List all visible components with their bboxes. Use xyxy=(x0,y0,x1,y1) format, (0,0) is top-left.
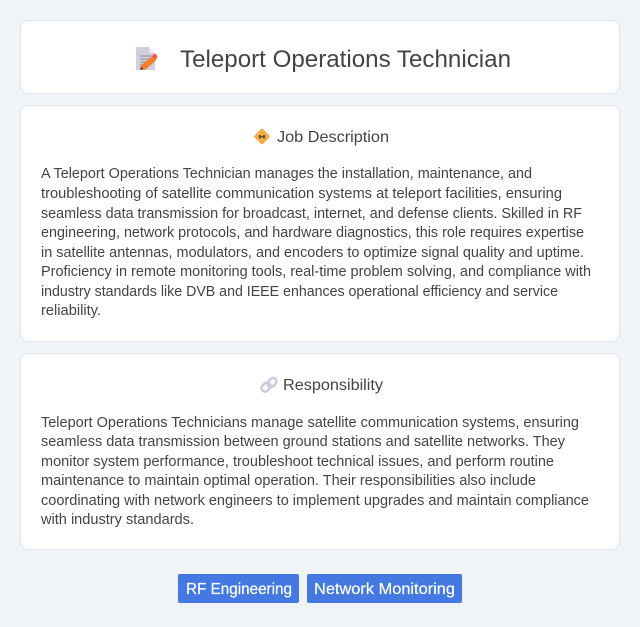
icon: document with pencil xyxy=(136,47,157,70)
text block: job description: seamless data transmission for broadcast, internet, and defense clients. Skilled in RF xyxy=(41,206,582,222)
text block: job description: Proficiency in remote monitoring tools, real-time problem solving, and compliance with xyxy=(41,264,591,280)
heading: job description: Job Description xyxy=(277,129,389,146)
icon: chain link xyxy=(260,376,278,393)
panel: job description xyxy=(20,106,620,342)
tag: RF Engineering xyxy=(178,574,299,603)
text block: responsibility: maintenance to maintain optimal operation. Their responsibilities also include xyxy=(41,473,536,489)
text block: responsibility: with industry standards. xyxy=(40,512,194,528)
text block: job description: A Teleport Operations Technician manages the installation, maintenance, and xyxy=(41,166,532,182)
text block: responsibility: seamless data transmission between ground stations and satellite networks. They xyxy=(41,434,566,450)
text block: job description: in satellite antennas, modulators, and encoders to optimize signal quality and uptime. xyxy=(41,245,584,261)
text block: responsibility: Teleport Operations Technicians manage satellite communication systems, ensuring xyxy=(41,415,579,431)
tag: RF Engineering: RF Engineering xyxy=(186,581,292,598)
heading: title: Teleport Operations Technician xyxy=(180,46,511,73)
panel: responsibility xyxy=(20,354,620,550)
text block: job description: reliability. xyxy=(41,303,101,319)
text block: responsibility: coordinating with network engineers to implement upgrades and maintain compliance xyxy=(41,493,589,509)
text block: job description: troubleshooting of satellite communication systems at teleport facilities, ensuring xyxy=(41,186,562,202)
text block: job description xyxy=(41,166,591,319)
text block: job description: engineering, network protocols, and hardware diagnostics, this role requires expertise xyxy=(41,225,584,241)
text block: responsibility xyxy=(40,415,589,528)
tag: Network Monitoring: Network Monitoring xyxy=(314,581,455,598)
heading: responsibility: Responsibility xyxy=(283,377,383,394)
text block: responsibility: monitor system performance, troubleshoot technical issues, and perform routine xyxy=(41,454,554,470)
panel: page title xyxy=(20,20,620,94)
text block: job description: industry standards like DVB and IEEE enhances operational efficiency and service xyxy=(41,284,558,300)
icon: orange diamond xyxy=(254,128,270,145)
tag: Network Monitoring xyxy=(307,574,462,603)
